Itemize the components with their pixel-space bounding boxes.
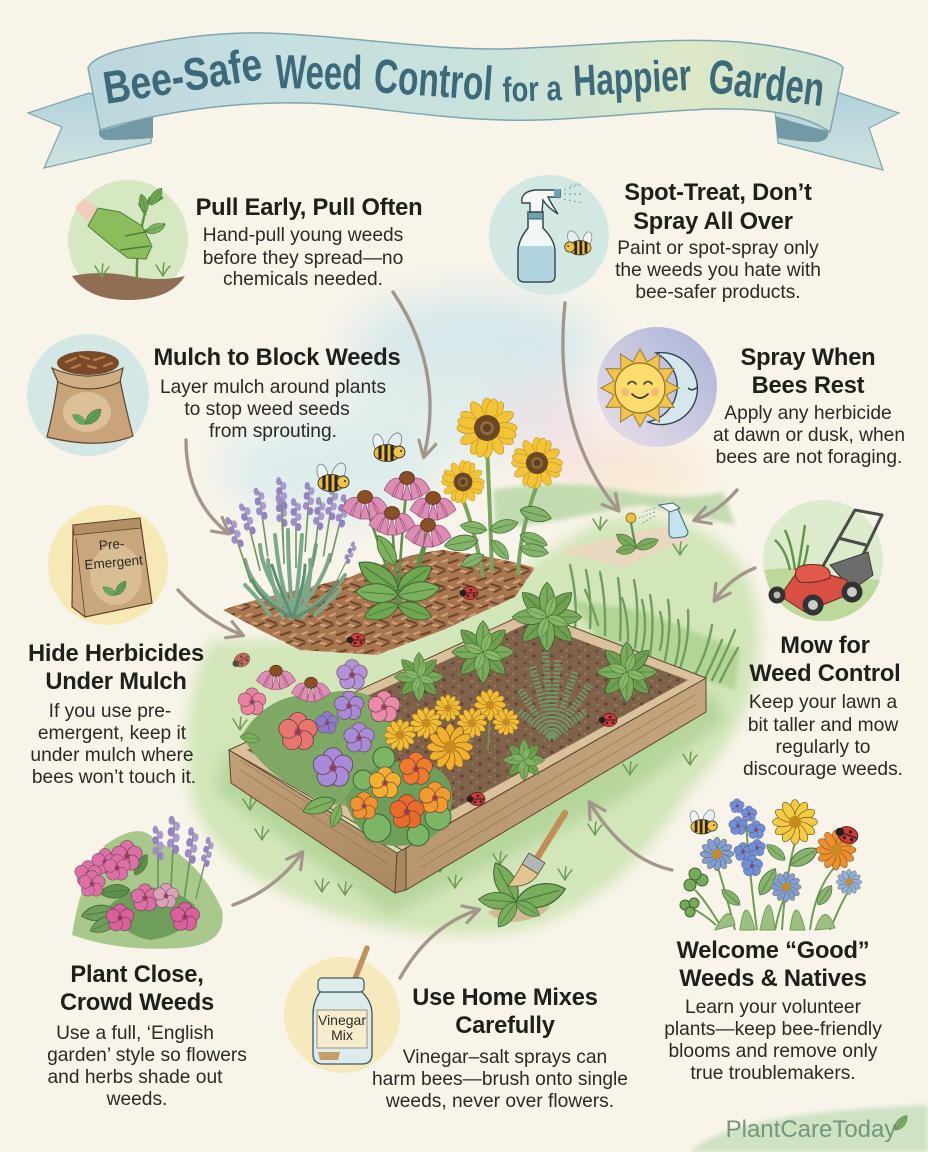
text: good weeds body: true troublemakers. — [690, 1063, 856, 1084]
text: spot treat body — [615, 238, 821, 303]
title — [99, 37, 827, 117]
text: hide herbicides body: bees won’t touch it. — [32, 767, 196, 788]
text: hide herbicides body — [30, 701, 196, 788]
arrow: home mixes — [400, 910, 478, 978]
rosemary — [518, 650, 590, 738]
text: home mixes body: Vinegar–salt sprays can — [403, 1047, 607, 1068]
panel: mow — [743, 500, 903, 780]
raised garden bed — [229, 611, 706, 893]
text: mow body — [743, 692, 903, 780]
heading: spot treat: Spray All Over — [633, 209, 793, 235]
banner folds — [99, 115, 828, 142]
text: spot treat body: the weeds you hate with — [615, 260, 821, 281]
chart: central garden illustration — [223, 398, 740, 931]
text: mulch body: Layer mulch around plants — [160, 377, 386, 398]
text: hide herbicides body: under mulch where — [30, 745, 194, 766]
text: mulch body: to stop weed seeds — [184, 399, 350, 420]
text: plant close body — [47, 1023, 247, 1110]
bed left wood side — [229, 750, 397, 893]
arrow: plant close — [233, 853, 302, 905]
text: pull early body — [203, 225, 403, 290]
title: Control — [372, 50, 495, 111]
arrow: hide herbicides — [178, 590, 242, 635]
heading: plant close: Plant Close, — [70, 962, 204, 988]
text: home mixes body: weeds, never over flowers. — [385, 1091, 614, 1112]
arrow: pull early — [393, 292, 430, 456]
icon: lavender — [224, 477, 359, 618]
text: mow body: bit taller and mow — [748, 715, 898, 736]
icon: vinegar jar — [284, 948, 400, 1073]
heading: good weeds — [677, 938, 869, 992]
icon: mulch sack — [27, 334, 149, 456]
heading: home mixes — [412, 985, 598, 1039]
icon: tall grass — [570, 565, 740, 690]
text: spray when bees rest body — [713, 403, 905, 468]
text: good weeds body: Learn your volunteer — [685, 997, 862, 1018]
text: plant close body: weeds. — [106, 1089, 167, 1110]
soil — [247, 622, 688, 838]
panel: hide herbicides — [28, 505, 204, 788]
title: Garden — [706, 50, 827, 117]
heading: plant close — [60, 962, 214, 1016]
arrow: good weeds — [590, 803, 672, 870]
heading: mow: Mow for — [780, 633, 870, 659]
icon: red lawn mower — [763, 500, 883, 621]
panel: mulch — [27, 334, 401, 456]
text: mow body: Keep your lawn a — [749, 692, 897, 713]
heading: mow: Weed Control — [749, 661, 901, 687]
logo: PlantCareToday — [690, 1105, 928, 1152]
icon: vinegar jar: Mix — [331, 1027, 353, 1043]
heading: mulch: Mulch to Block Weeds — [154, 345, 401, 371]
icon: spray bottle and bee — [489, 175, 609, 295]
icon: bees near flowers — [315, 431, 405, 492]
text: mulch body — [160, 377, 386, 442]
text: plant close body: garden’ style so flowers — [47, 1045, 247, 1066]
text: plant close body: Use a full, ‘English — [56, 1023, 214, 1044]
dirt path — [560, 527, 690, 568]
herbs in bed — [394, 582, 657, 781]
watercolor sky wash — [220, 295, 735, 530]
text: spot treat body: Paint or spot-spray only — [617, 238, 819, 259]
title: Bee-Safe — [99, 37, 266, 114]
panel: plant close — [47, 816, 247, 1110]
text: pull early body: chemicals needed. — [223, 269, 383, 290]
heading: good weeds: Weeds & Natives — [679, 966, 867, 992]
logo: PlantCareToday: PlantCareToday — [726, 1116, 896, 1143]
flowers in bed — [238, 659, 520, 846]
panel: home mixes — [284, 948, 628, 1112]
heading: hide herbicides — [28, 641, 204, 695]
text: good weeds body — [664, 997, 882, 1084]
banner main ribbon — [88, 33, 843, 132]
panel: pull early — [68, 180, 422, 300]
icon: sun and moon — [597, 327, 717, 447]
icon: coneflowers — [342, 472, 456, 625]
text: spray when bees rest body: bees are not foraging. — [716, 447, 902, 468]
heading: home mixes: Use Home Mixes — [412, 985, 598, 1011]
icon: weed and paintbrush — [478, 813, 568, 931]
banner left tail — [28, 93, 153, 168]
text: home mixes body — [372, 1047, 628, 1112]
text: hide herbicides body: If you use pre- — [49, 701, 171, 722]
icon: ladybugs — [230, 586, 617, 806]
icon: pre-emergent bag — [48, 505, 168, 625]
icon: pre-emergent bag: Pre- — [98, 536, 125, 553]
text: mulch body: from sprouting. — [209, 421, 337, 442]
text: pull early body: Hand-pull young weeds — [203, 225, 403, 246]
text: hide herbicides body: emergent, keep it — [38, 723, 187, 744]
heading: spray when bees rest — [741, 345, 875, 399]
text: home mixes body: harm bees—brush onto single — [372, 1069, 628, 1090]
heading: home mixes: Carefully — [455, 1013, 556, 1039]
icon: wildflowers with bee and ladybug — [680, 799, 862, 930]
text: spray when bees rest body: at dawn or dusk, when — [713, 425, 905, 446]
bed right wood side — [406, 678, 706, 890]
arrow: spot treat — [563, 303, 618, 510]
mulch bed — [223, 550, 535, 655]
icon: spot-sprayed weed — [613, 503, 688, 556]
text: spray when bees rest body: Apply any herbicide — [724, 403, 892, 424]
banner right tail — [775, 93, 899, 170]
text: good weeds body: blooms and remove only — [668, 1041, 878, 1062]
icon: vinegar jar: Vinegar — [318, 1012, 366, 1028]
title banner — [28, 33, 899, 170]
icon: pre-emergent bag: Emergent — [84, 552, 144, 573]
text: mow body: regularly to — [776, 737, 870, 758]
icon: gloved hand pulling weed — [68, 180, 188, 300]
text: good weeds body: plants—keep bee-friendly — [664, 1019, 882, 1040]
arrow: mulch — [186, 440, 228, 533]
heading: pull early: Pull Early, Pull Often — [196, 195, 422, 221]
text: plant close body: and herbs shade out — [48, 1067, 223, 1088]
panel: spray when bees rest — [597, 327, 905, 468]
text: pull early body: before they spread—no — [203, 248, 403, 269]
arrow: mow — [715, 568, 755, 600]
heading: hide herbicides: Hide Herbicides — [28, 641, 204, 667]
title: for a — [502, 69, 563, 110]
icon: sunflowers — [441, 398, 563, 577]
title: Happier — [572, 51, 692, 106]
arrow: spray when bees rest — [695, 490, 737, 520]
text: spot treat body: bee-safer products. — [635, 282, 801, 303]
text: mow body: discourage weeds. — [743, 759, 903, 780]
icon: dense flower cluster — [72, 816, 223, 949]
heading: good weeds: Welcome “Good” — [677, 938, 869, 964]
heading: spray when bees rest: Bees Rest — [752, 373, 865, 399]
heading: spray when bees rest: Spray When — [741, 345, 875, 371]
panel: good weeds — [664, 799, 882, 1084]
heading: spot treat — [624, 180, 812, 235]
heading: plant close: Crowd Weeds — [60, 990, 214, 1016]
bed corner post — [395, 848, 406, 893]
title: Weed — [275, 46, 363, 101]
heading: hide herbicides: Under Mulch — [45, 669, 187, 695]
heading: spot treat: Spot-Treat, Don’t — [624, 180, 812, 206]
watercolor grass ground — [187, 517, 760, 935]
heading: mow — [749, 633, 901, 687]
panel: spot treat — [489, 175, 821, 303]
bed top rim — [229, 611, 706, 850]
